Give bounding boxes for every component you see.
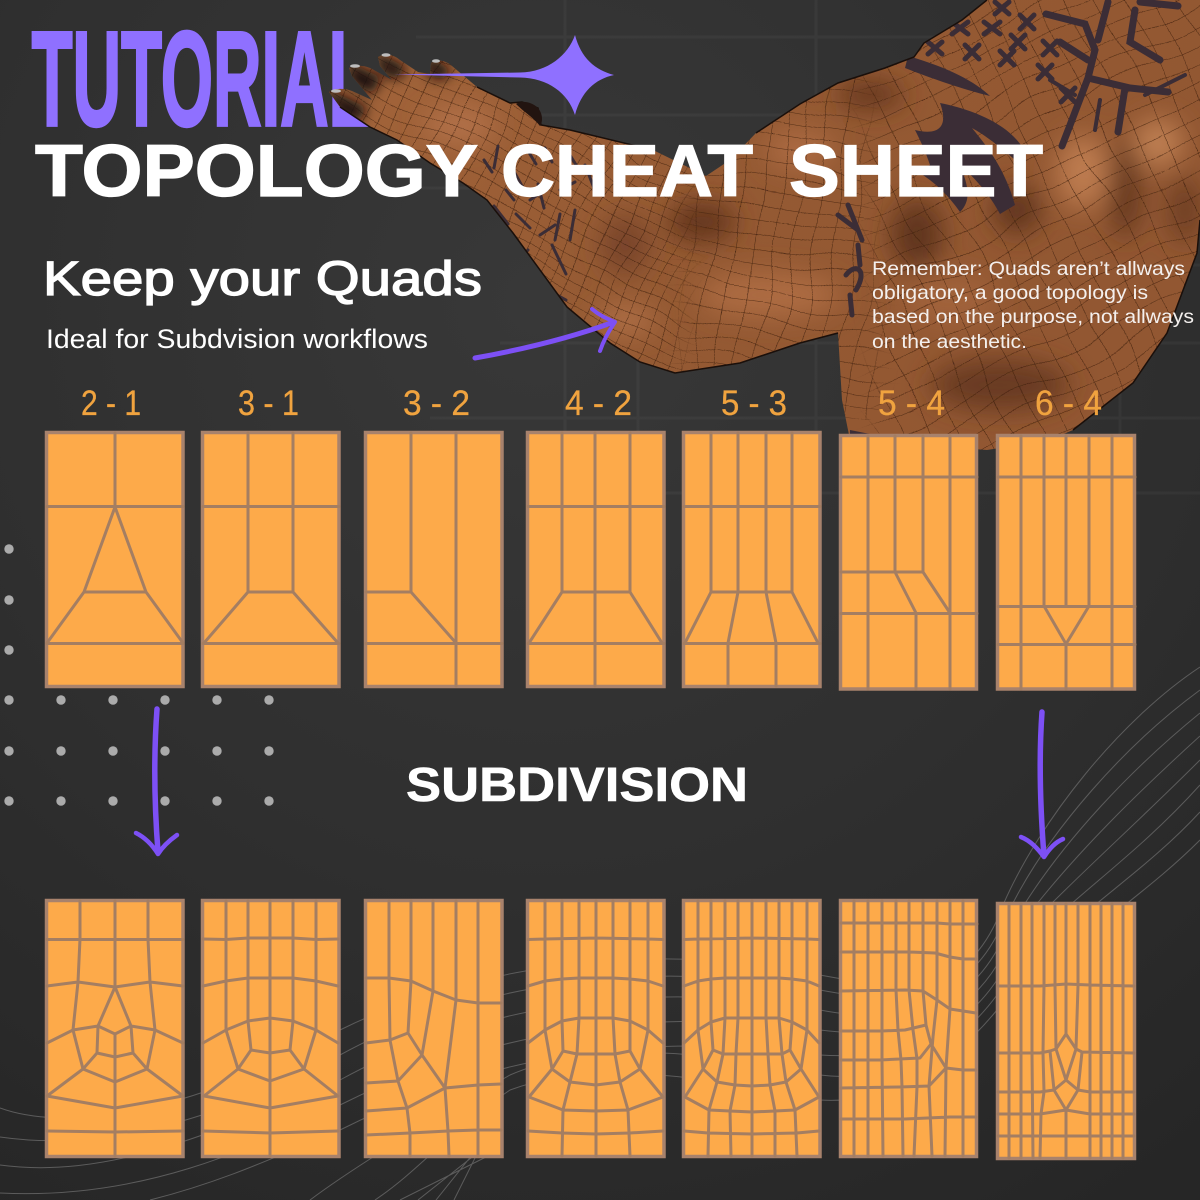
callout: remember note: Remember: Quads aren’t allways	[872, 258, 1185, 280]
panel: 4-2 subdivided	[528, 900, 664, 1156]
title: TOPOLOGY CHEAT SHEET: CHEAT	[501, 131, 753, 212]
panel: 4-2 base	[528, 432, 664, 686]
column labels: 5 - 3	[721, 384, 787, 423]
title: TOPOLOGY CHEAT SHEET: TOPOLOGY	[35, 131, 478, 212]
panel: 5-4 subdivided	[840, 900, 977, 1156]
panel: 2-1 base	[46, 432, 183, 686]
column labels	[81, 384, 1102, 423]
panel: 3-1 subdivided	[202, 900, 339, 1156]
title: TOPOLOGY CHEAT SHEET: SHEET	[789, 131, 1043, 212]
claw tips	[331, 53, 440, 93]
icon: four-point star with tail	[394, 35, 614, 115]
column labels: 3 - 1	[238, 384, 299, 423]
column labels: 6 - 4	[1035, 384, 1102, 423]
tattoos	[484, 2, 1185, 450]
arrow: left down	[136, 709, 177, 854]
section heading: SUBDIVISION: SUBDIVISION	[406, 759, 748, 812]
title: TOPOLOGY CHEAT SHEET	[35, 131, 1043, 212]
text: TUTORIAL	[32, 3, 370, 154]
panel: 3-2 base	[366, 432, 502, 686]
panel: 5-3 base	[684, 432, 820, 686]
panel: 6-4 subdivided	[998, 904, 1134, 1158]
callout: remember note: based on the purpose, not allways	[872, 306, 1194, 328]
column labels: 2 - 1	[81, 384, 141, 423]
panel: 6-4 base	[998, 436, 1135, 689]
thumb claw	[516, 102, 542, 126]
arrow: pointing to arm	[475, 309, 615, 358]
column labels: 5 - 4	[878, 384, 945, 423]
background wave lines	[0, 667, 1200, 1200]
column labels: 3 - 2	[403, 384, 470, 423]
column labels: 4 - 2	[565, 384, 632, 423]
panel: 3-1 base	[202, 432, 339, 686]
panel: 3-2 subdivided	[366, 900, 502, 1156]
panel: 2-1 subdivided	[46, 900, 183, 1156]
callout: remember note	[872, 258, 1194, 353]
heading: Keep your Quads: Keep your Quads	[43, 253, 482, 306]
callout: remember note: on the aesthetic.	[872, 331, 1027, 353]
subheading: Ideal for Subdvision workflows	[46, 324, 428, 354]
panel: 5-3 subdivided	[684, 900, 820, 1156]
arrow: right down	[1021, 712, 1063, 857]
callout: remember note: obligatory, a good topology is	[872, 282, 1148, 304]
dot grid	[4, 544, 274, 806]
illustration: wireframe arm and torso	[329, 0, 1200, 450]
panel: 5-4 base	[840, 436, 977, 689]
